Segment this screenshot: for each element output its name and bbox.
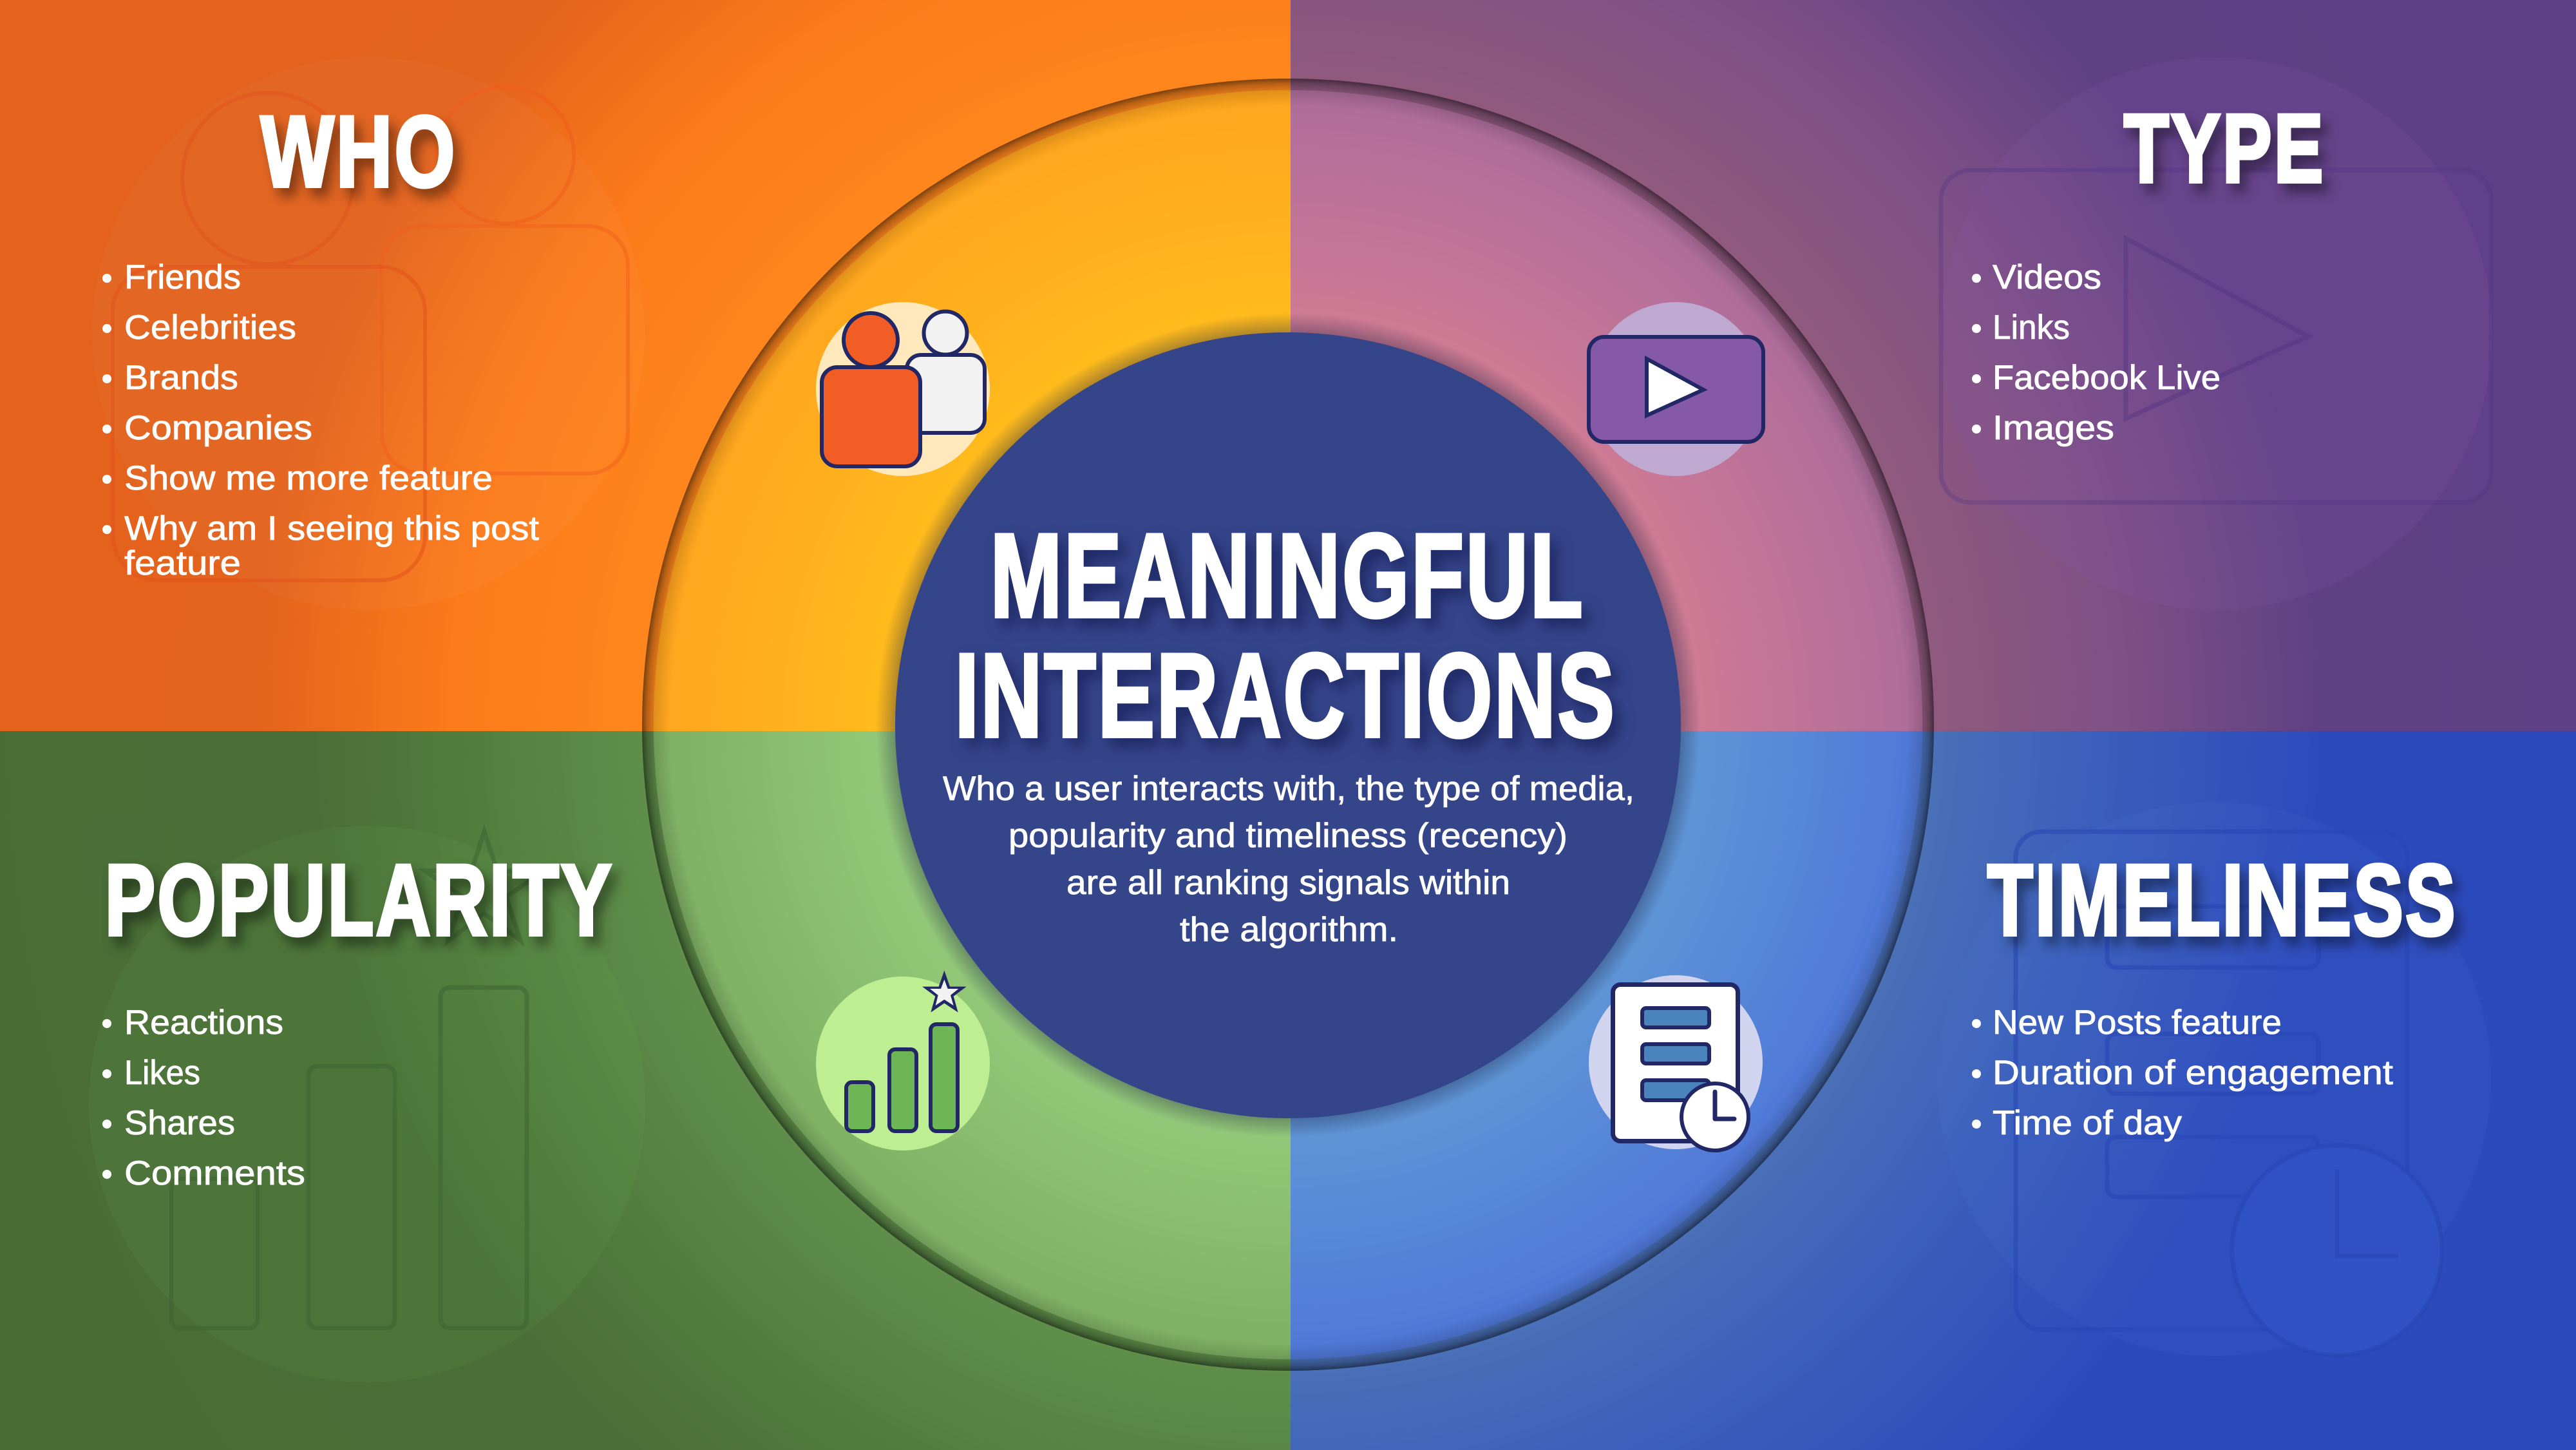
center description: are all ranking signals within bbox=[1066, 864, 1510, 902]
list: timeliness: Time of day bbox=[1993, 1104, 2183, 1142]
heading: who: WHO bbox=[261, 96, 457, 208]
center description: Who a user interacts with, the type of media, bbox=[943, 770, 1634, 808]
icon: bar chart with star bbox=[816, 971, 990, 1150]
list: timeliness: Duration of engagement bbox=[1993, 1054, 2393, 1092]
list: popularity bbox=[102, 1004, 305, 1192]
list: popularity: Reactions bbox=[124, 1004, 283, 1042]
list: who: Why am I seeing this post bbox=[124, 510, 539, 548]
icon: people bbox=[816, 302, 990, 476]
list: popularity: Shares bbox=[124, 1104, 235, 1142]
heading: popularity: POPULARITY bbox=[105, 844, 614, 957]
list: who: Companies bbox=[124, 409, 312, 447]
panel: timeliness bbox=[1291, 731, 2576, 1450]
list: popularity: Comments bbox=[124, 1154, 305, 1192]
watermark: bar chart icon bbox=[89, 826, 645, 1382]
watermark: people icon bbox=[92, 57, 645, 610]
list: type: Videos bbox=[1993, 258, 2101, 296]
list: type: Images bbox=[1993, 409, 2114, 447]
icon: video play bbox=[1589, 302, 1763, 476]
watermark: video icon bbox=[1940, 57, 2492, 610]
list: timeliness bbox=[1972, 1004, 2393, 1142]
panel: who bbox=[0, 0, 1291, 731]
center description: popularity and timeliness (recency) bbox=[1009, 817, 1567, 855]
list: who bbox=[102, 258, 539, 582]
list: who: Brands bbox=[124, 359, 238, 397]
list: timeliness: New Posts feature bbox=[1993, 1004, 2282, 1042]
center title: INTERACTIONS bbox=[955, 629, 1616, 761]
list: type: Facebook Live bbox=[1993, 359, 2221, 397]
panel: popularity bbox=[0, 731, 1291, 1450]
list: who: feature bbox=[124, 544, 241, 582]
center description bbox=[943, 770, 1634, 949]
list: who: Friends bbox=[124, 258, 241, 296]
icon: document with clock bbox=[1589, 975, 1763, 1150]
list: type bbox=[1972, 258, 2221, 447]
panel: type bbox=[1291, 0, 2576, 731]
center disk bbox=[876, 313, 1700, 1138]
ring: four coloured quadrants bbox=[644, 84, 1935, 1375]
list: who: Show me more feature bbox=[124, 459, 493, 497]
list: who: Celebrities bbox=[124, 309, 296, 347]
watermark: document clock icon bbox=[1937, 802, 2491, 1356]
list: type: Links bbox=[1993, 309, 2070, 347]
list: popularity: Likes bbox=[124, 1054, 200, 1092]
ring bezel shadow bbox=[642, 79, 1934, 1371]
center title: MEANINGFUL bbox=[990, 509, 1585, 642]
heading: type: TYPE bbox=[2124, 94, 2325, 202]
center title bbox=[955, 509, 1616, 761]
center description: the algorithm. bbox=[1180, 911, 1398, 949]
